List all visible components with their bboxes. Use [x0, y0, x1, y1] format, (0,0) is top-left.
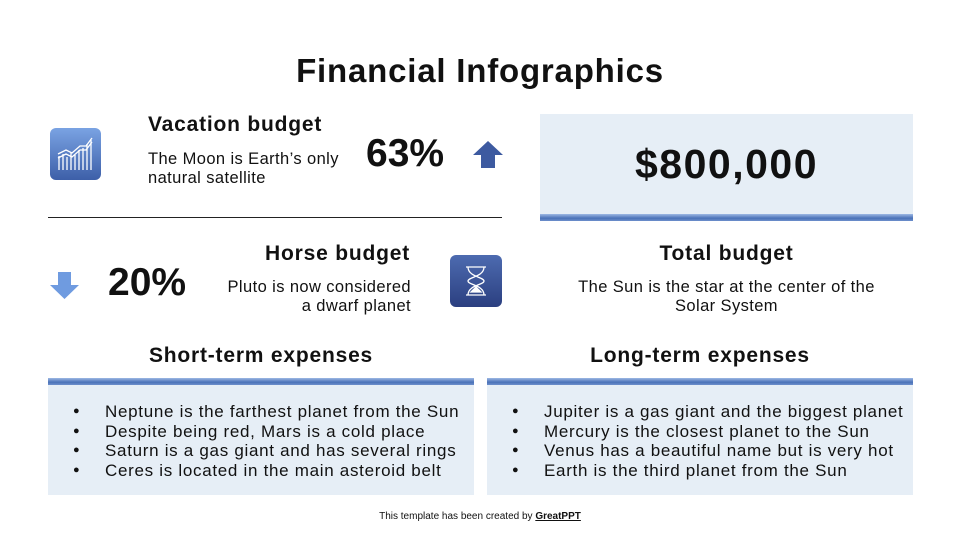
text: horse — [228, 278, 411, 315]
panel: short-term: Saturn is a gas giant and has several rings — [105, 441, 456, 460]
panel: long-term: Jupiter is a gas giant and the biggest planet — [544, 402, 903, 421]
icon: down arrow — [50, 272, 79, 299]
panel: short-term: Despite being red, Mars is a cold place — [105, 422, 425, 440]
heading: vacation budget: Vacation budget — [148, 113, 322, 136]
stat: 63%: 63% — [366, 132, 444, 175]
panel: total amount: $800,000 — [635, 141, 818, 187]
panel: long-term — [487, 378, 913, 495]
icon: up arrow — [473, 141, 503, 168]
text: vacation — [148, 150, 339, 187]
title: Financial Infographics — [296, 52, 664, 89]
stat: 20%: 20% — [108, 261, 186, 304]
heading: horse budget: Horse budget — [265, 242, 410, 265]
text: vacation: natural satellite — [148, 169, 266, 187]
panel: short-term: Ceres is located in the main asteroid belt — [105, 460, 442, 480]
icon: chart — [50, 128, 101, 180]
heading: total budget: Total budget — [659, 242, 794, 265]
text: total: Solar System — [675, 297, 778, 315]
panel: long-term: Mercury is the closest planet to the Sun — [544, 422, 870, 440]
text: vacation: The Moon is Earth’s only — [148, 150, 339, 168]
footer: This template has been created by GreatPPT — [379, 511, 581, 522]
heading: short-term: Short-term expenses — [149, 344, 373, 367]
panel: total amount — [540, 114, 913, 214]
text: horse: Pluto is now considered — [228, 278, 411, 296]
panel: long-term: Earth is the third planet from the Sun — [544, 460, 847, 480]
panel: short-term — [48, 378, 474, 495]
icon: hourglass — [450, 255, 502, 307]
heading: long-term: Long-term expenses — [590, 344, 810, 367]
panel: long-term: Venus has a beautiful name but is very hot — [544, 441, 894, 460]
text: horse: a dwarf planet — [302, 297, 411, 315]
text: total — [578, 278, 875, 315]
panel: short-term: Neptune is the farthest planet from the Sun — [105, 402, 459, 421]
text: total: The Sun is the star at the center of the — [578, 278, 875, 296]
